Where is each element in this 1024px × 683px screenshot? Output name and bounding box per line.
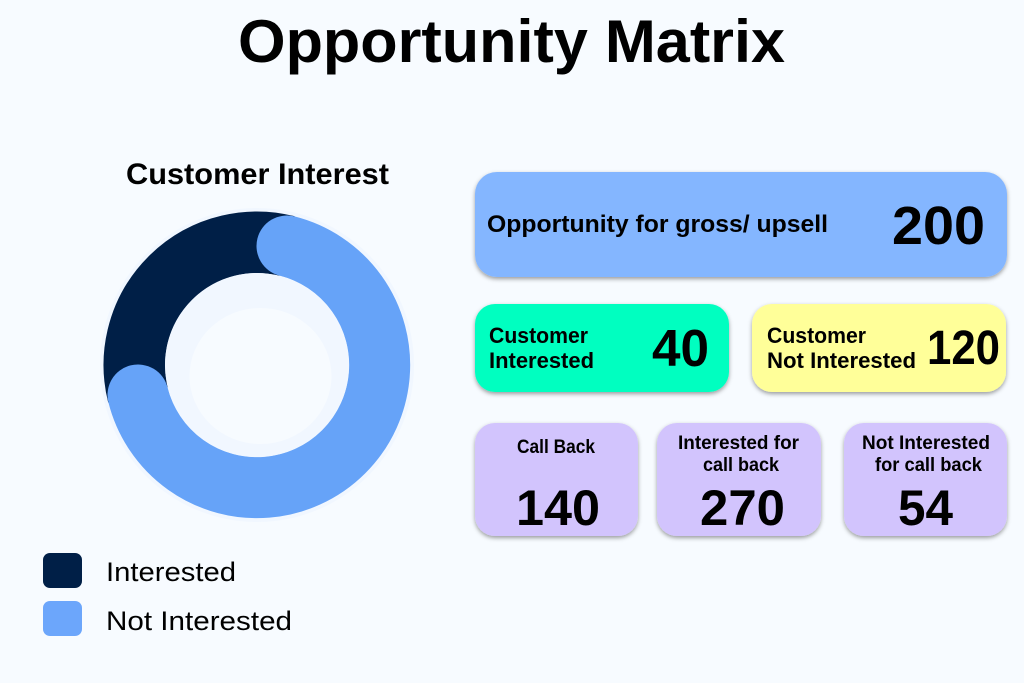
card: customer not interested: 120 [927,322,1000,375]
card: interested for call back: call back [703,454,779,476]
card: opportunity: Opportunity for gross/ upsell [487,211,828,238]
card: opportunity: 200 [892,196,985,256]
title: Opportunity Matrix [238,8,785,75]
card: call back: 140 [516,480,600,536]
card: customer not interested: Customer [767,323,866,348]
card: interested for call back [657,423,821,536]
card: not interested for call back [844,423,1007,536]
card: opportunity [475,172,1007,277]
card: customer not interested [752,304,1006,392]
card: customer interested: 40 [652,320,709,378]
card: call back: Call Back [517,436,595,458]
card: not interested for call back: for call back [875,454,982,476]
card: call back [475,423,638,536]
legend: Not Interested [106,606,292,636]
chart heading: Customer Interest: Customer Interest [126,158,389,191]
legend: Interested [106,557,236,587]
card: not interested for call back: 54 [898,480,953,536]
card: customer interested [475,304,729,392]
card: customer interested: Interested [489,348,594,373]
card: interested for call back: 270 [700,480,785,536]
card: interested for call back: Interested for [678,432,799,454]
card: customer interested: Customer [489,323,588,348]
donut chart [100,208,414,522]
card: not interested for call back: Not Interested [862,432,990,454]
card: customer not interested: Not Interested [767,348,916,373]
legend [43,553,292,636]
